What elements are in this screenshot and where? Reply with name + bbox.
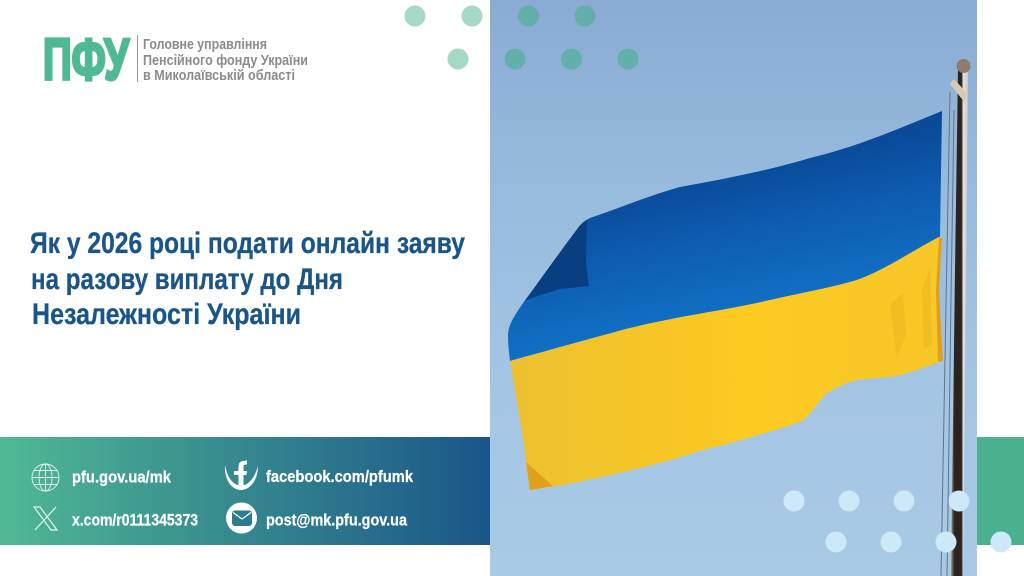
flag: yellow fold shadows	[890, 268, 932, 358]
flagpole	[941, 59, 970, 576]
contact band	[0, 437, 490, 545]
organisation name: в Миколаївській області	[143, 67, 295, 84]
icon: X	[34, 507, 57, 530]
right accent strip	[977, 437, 1024, 545]
logo: ПФУ with organisation name	[43, 28, 312, 92]
icon: mail	[226, 502, 257, 534]
organisation name: Пенсійного фонду України	[143, 52, 308, 69]
flag: yellow stripe	[510, 237, 943, 490]
decorative dots: top	[404, 6, 638, 70]
website link: pfu.gov.ua/mk	[72, 468, 172, 486]
title: на разову виплату до Дня	[31, 263, 343, 296]
facebook link: facebook.com/pfumk	[266, 467, 414, 486]
organisation name: Головне управління	[143, 36, 267, 53]
title: Незалежності України	[32, 298, 301, 331]
flag: orange hem and shaded corner	[526, 238, 943, 490]
logo separator	[137, 35, 138, 82]
icon: facebook	[225, 460, 258, 490]
X link: x.com/r0111345373	[72, 510, 198, 530]
logo mark: ПФУ	[43, 28, 130, 92]
email link: post@mk.pfu.gov.ua	[266, 510, 408, 530]
flag: blue stripe	[508, 111, 942, 361]
decorative dots: bottom	[784, 490, 1012, 552]
photo: Ukrainian flag on a pole against the sky	[490, 0, 977, 576]
flag: dark fold	[525, 220, 589, 301]
title: Як у 2026 році подати онлайн заяву	[30, 227, 465, 260]
icon: globe	[32, 464, 59, 491]
